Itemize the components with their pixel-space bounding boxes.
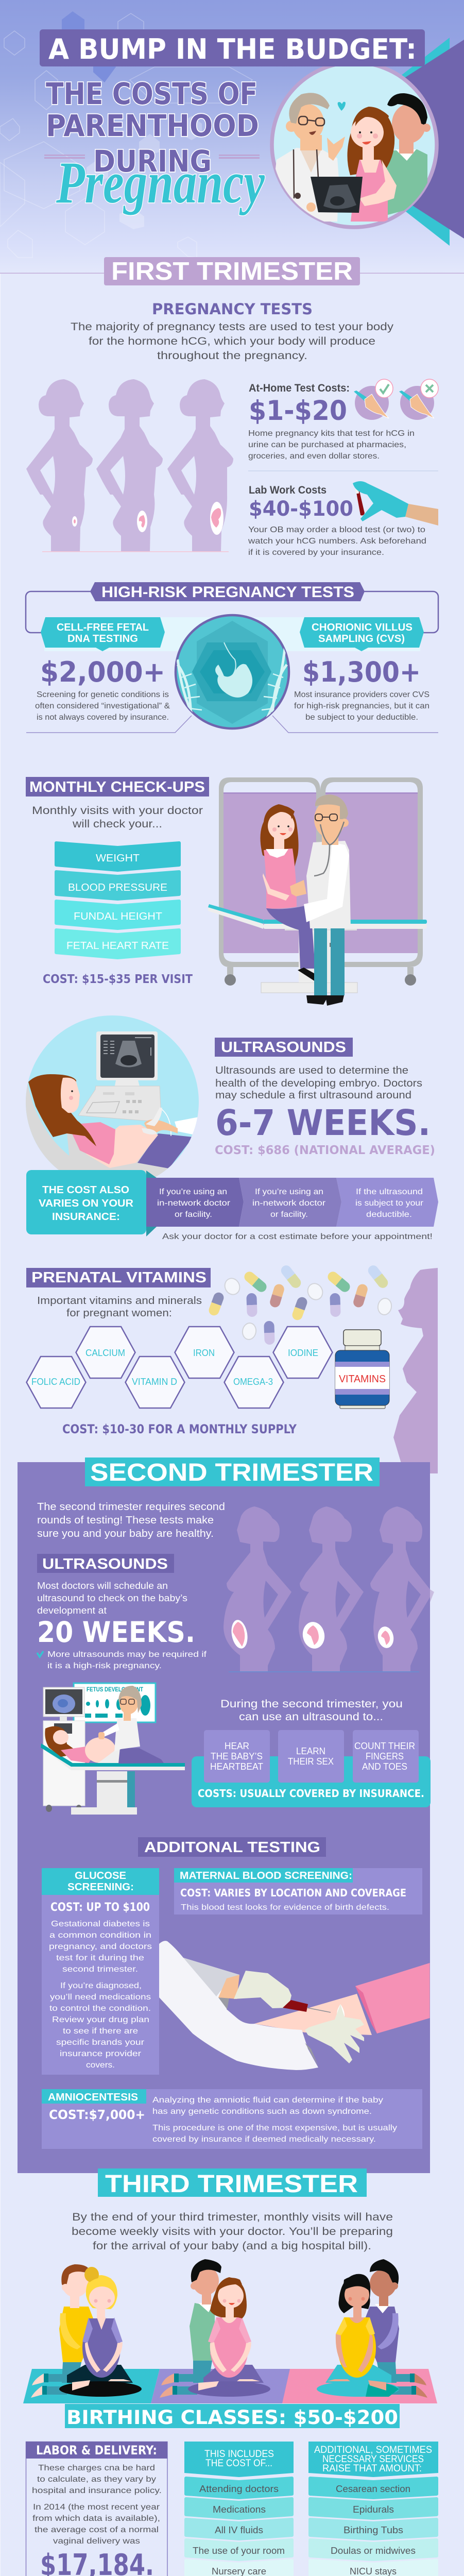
panel: second trimester bbox=[18, 1462, 430, 2173]
panel: labor and delivery: from which data is available), bbox=[32, 2514, 160, 2523]
panel: glucose screening: to control the condition. bbox=[49, 2004, 151, 2013]
prenatal vitamins intro: for pregnant women: bbox=[66, 1308, 172, 1319]
ultrasounds text: COST: $686 (NATIONAL AVERAGE) bbox=[215, 1144, 435, 1157]
hero circle with doctor and couple bbox=[272, 62, 437, 227]
panel: maternal blood screening: COST: VARIES BY LOCATION AND COVERAGE bbox=[180, 1887, 406, 1899]
table base bbox=[97, 1771, 127, 1807]
vitamin hexagons: VITAMIN D bbox=[132, 1377, 177, 1387]
lab work costs: if it is covered by your insurance. bbox=[248, 548, 384, 557]
insurance strip: in-network doctor bbox=[157, 1199, 231, 1208]
vitamin hexagons: FOLIC ACID bbox=[31, 1377, 80, 1387]
patient bbox=[28, 1074, 158, 1168]
second trimester intro: rounds of testing! These tests make bbox=[37, 1515, 214, 1526]
second trimester silhouettes bbox=[224, 1506, 434, 1672]
chevron list: checks: FETAL HEART RATE bbox=[66, 940, 169, 952]
third trimester intro: become weekly visits with your doctor. You’ll be preparing bbox=[72, 2226, 393, 2238]
panel: chorionic villus sampling: $1,300+ bbox=[302, 656, 421, 688]
lab work costs: Lab Work Costs bbox=[249, 484, 326, 496]
pregnancy tests heading: PREGNANCY TESTS bbox=[152, 300, 313, 318]
embryo and dna circle bbox=[176, 615, 289, 732]
woman bbox=[347, 107, 397, 222]
prenatal vitamins heading bbox=[26, 1268, 211, 1287]
subtitle: DURING bbox=[93, 144, 212, 179]
panel: labor and delivery: the average cost of a normal bbox=[35, 2526, 159, 2534]
panel: glucose screening: second trimester. bbox=[62, 1965, 138, 1974]
third trimester intro bbox=[72, 2211, 393, 2252]
vitamins cost: COST: $10-30 FOR A MONTHLY SUPPLY bbox=[62, 1422, 297, 1436]
chevron list: checks: WEIGHT bbox=[96, 853, 140, 864]
chevron list: checks: BLOOD PRESSURE bbox=[68, 882, 167, 893]
at-home test costs: $1-$20 bbox=[249, 395, 347, 427]
insurance strip: If you’re using an bbox=[255, 1188, 323, 1196]
panel: amniocentesis: Analyzing the amniotic fluid can determine if the baby bbox=[152, 2096, 383, 2105]
cost estimate note: Ask your doctor for a cost estimate before your appointment! bbox=[162, 1232, 433, 1241]
panel: labor and delivery: In 2014 (the most recent year bbox=[33, 2503, 160, 2512]
vitamin hexagons: CALCIUM bbox=[85, 1348, 125, 1358]
insurance strip: in-network doctor bbox=[252, 1199, 326, 1208]
panel: glucose screening: covers. bbox=[86, 2061, 115, 2070]
subtitle: PARENTHOOD bbox=[46, 108, 259, 143]
panel: maternal blood screening: This blood test looks for evidence of birth defects. bbox=[181, 1903, 389, 1912]
panel: chorionic villus sampling: SAMPLING (CVS) bbox=[318, 633, 405, 645]
panel: ultrasound uses and cost: HEARTBEAT bbox=[210, 1761, 263, 1772]
second trimester ultrasounds text: it is a high-risk pregnancy. bbox=[47, 1662, 162, 1670]
chevron list: checks: FUNDAL HEIGHT bbox=[74, 911, 162, 922]
panel: chorionic villus sampling: Most insurance providers cover CVS bbox=[294, 690, 429, 699]
prenatal vitamins intro bbox=[37, 1295, 202, 1319]
second trimester banner: SECOND TRIMESTER bbox=[90, 1459, 373, 1486]
ultrasounds text: may schedule a first ultrasound around bbox=[215, 1090, 411, 1101]
insurance strip: If the ultrasound bbox=[356, 1188, 423, 1196]
panel: chorionic villus sampling bbox=[294, 617, 429, 722]
illustration: ultrasound exam bbox=[26, 1015, 199, 1177]
vitamin hexagons: OMEGA-3 bbox=[233, 1377, 273, 1387]
illustration: doctor exam room bbox=[208, 777, 427, 1006]
panel: cell-free fetal dna testing: $2,000+ bbox=[40, 656, 165, 688]
first trimester banner bbox=[0, 257, 464, 285]
panel: ultrasound uses and cost: AND TOES bbox=[362, 1761, 407, 1772]
panel: amniocentesis bbox=[42, 2089, 422, 2149]
panel: glucose screening: specific brands your bbox=[56, 2038, 145, 2047]
panel: glucose screening: pregnancy, and doctors bbox=[49, 1942, 152, 1951]
panel: amniocentesis: has any genetic conditions such as down syndrome. bbox=[152, 2107, 372, 2116]
second trimester ultrasounds heading: ULTRASOUNDS bbox=[42, 1556, 168, 1572]
panel: glucose screening: to see if there are bbox=[63, 2027, 138, 2036]
panel: cell-free fetal dna testing: often considered “investigational” & bbox=[35, 702, 170, 710]
panel: glucose screening bbox=[42, 1868, 159, 2075]
panel: cell-free fetal dna testing: CELL-FREE FETAL bbox=[57, 622, 149, 633]
panel: chorionic villus sampling: CHORIONIC VILLUS bbox=[312, 622, 413, 633]
pills bbox=[208, 1263, 393, 1345]
list: costs included: Attending doctors bbox=[199, 2484, 279, 2494]
insurance strip: INSURANCE: bbox=[52, 1211, 120, 1223]
high-risk section frame bbox=[26, 591, 438, 733]
panel: labor and delivery bbox=[26, 2442, 167, 2576]
panel: glucose screening: GLUCOSE bbox=[75, 1870, 126, 1882]
first trimester banner: FIRST TRIMESTER bbox=[111, 258, 353, 285]
third trimester banner: THIRD TRIMESTER bbox=[105, 2171, 358, 2198]
pregnancy tests intro: for the hormone hCG, which your body will produce bbox=[89, 335, 375, 347]
list: additional services: Epidurals bbox=[353, 2504, 394, 2515]
heart bbox=[338, 102, 346, 111]
at-home test costs: urine can be purchased at pharmacies, bbox=[248, 440, 406, 449]
second trimester ultrasound uses intro: During the second trimester, you bbox=[220, 1698, 403, 1710]
illustration: fetal development exam: FETUS DEVELOPMENT bbox=[87, 1686, 144, 1693]
panel: amniocentesis: covered by insurance if deemed medically necessary. bbox=[152, 2135, 376, 2144]
insurance strip: THE COST ALSO bbox=[42, 1184, 129, 1196]
second trimester intro: The second trimester requires second bbox=[37, 1501, 225, 1513]
second trimester intro bbox=[37, 1501, 225, 1539]
list: additional services: ADDITIONAL, SOMETIMES bbox=[314, 2445, 432, 2455]
second trimester ultrasounds text: 20 WEEKS. bbox=[37, 1616, 195, 1649]
panel: maternal blood screening bbox=[174, 1868, 422, 1914]
panel: cell-free fetal dna testing: Screening for genetic conditions is bbox=[37, 690, 169, 699]
panel: amniocentesis: This procedure is one of the most expensive, but is usually bbox=[152, 2124, 397, 2132]
second trimester ultrasounds text: Most doctors will schedule an bbox=[37, 1581, 168, 1591]
ultrasounds text: Ultrasounds are used to determine the bbox=[215, 1065, 408, 1076]
couple two bbox=[160, 2259, 270, 2398]
birthing class mats bbox=[23, 2369, 437, 2403]
monthly check-ups intro: Monthly visits with your doctor bbox=[32, 805, 203, 817]
panel: ultrasound uses and cost bbox=[192, 1730, 431, 1807]
panel: chorionic villus sampling: for high-risk pregnancies, but it can bbox=[294, 702, 429, 710]
panel: chorionic villus sampling: be subject to your deductible. bbox=[305, 713, 418, 722]
panel: cell-free fetal dna testing: DNA TESTING bbox=[67, 633, 138, 645]
insurance strip: or facility. bbox=[270, 1210, 308, 1219]
second trimester ultrasound uses intro: can use an ultrasound to... bbox=[239, 1711, 383, 1723]
panel: maternal blood screening: MATERNAL BLOOD SCREENING: bbox=[180, 1870, 352, 1882]
subtitle bbox=[44, 76, 265, 215]
panel: ultrasound uses and cost: HEAR bbox=[225, 1741, 249, 1751]
panel: glucose screening: Review your drug plan bbox=[52, 2015, 149, 2024]
panel: amniocentesis: AMNIOCENTESIS bbox=[48, 2092, 138, 2103]
vitamin hexagons: IODINE bbox=[288, 1348, 318, 1358]
additional testing heading: ADDITONAL TESTING bbox=[144, 1839, 320, 1856]
lab work costs bbox=[248, 484, 426, 557]
insurance strip: is subject to your bbox=[355, 1199, 424, 1208]
insurance strip: deductible. bbox=[366, 1210, 412, 1219]
doctor bbox=[290, 794, 351, 1006]
monthly check-ups heading: MONTHLY CHECK-UPS bbox=[29, 779, 205, 795]
second trimester ultrasounds text: ultrasound to check on the baby’s bbox=[37, 1593, 187, 1603]
three pregnant silhouettes bbox=[26, 379, 233, 552]
high-risk heading: HIGH-RISK PREGNANCY TESTS bbox=[101, 584, 354, 601]
panel: glucose screening: test for it during the bbox=[56, 1954, 144, 1962]
illustration: fetal development exam bbox=[41, 1683, 185, 1815]
doctor bbox=[114, 1718, 140, 1752]
ultrasounds text: health of the developing embryo. Doctors bbox=[215, 1078, 422, 1089]
icon: gloved hand with blood vial bbox=[353, 481, 438, 526]
vitamin hexagons bbox=[27, 1327, 333, 1408]
list: additional services: Birthing Tubs bbox=[343, 2525, 403, 2535]
birthing classes banner: BIRTHING CLASSES: $50-$200 bbox=[66, 2406, 398, 2429]
monthly check-ups cost: COST: $15-$35 PER VISIT bbox=[43, 973, 193, 986]
panel: labor and delivery: These charges cna be hard bbox=[38, 2464, 155, 2472]
panel: amniocentesis: COST:$7,000+ bbox=[49, 2107, 145, 2122]
vitamin bottle: VITAMINS bbox=[339, 1374, 386, 1385]
prenatal vitamins heading: PRENATAL VITAMINS bbox=[31, 1269, 207, 1286]
panel: cell-free fetal dna testing bbox=[35, 617, 170, 722]
insurance strip: or facility. bbox=[175, 1210, 212, 1219]
third trimester intro: for the arrival of your baby (and a big hospital bill). bbox=[93, 2240, 371, 2252]
list: additional services bbox=[308, 2442, 438, 2576]
insurance strip: If you’re using an bbox=[159, 1188, 227, 1196]
list: additional services: Doulas or midwives bbox=[331, 2546, 416, 2556]
second trimester ultrasounds text: More ultrasounds may be required if bbox=[47, 1650, 207, 1659]
pregnancy tests intro: The majority of pregnancy tests are used to test your body bbox=[71, 321, 394, 333]
vitamin bottle bbox=[335, 1330, 389, 1409]
patient bbox=[45, 1726, 80, 1757]
panel: glucose screening: COST: UP TO $100 bbox=[50, 1901, 150, 1914]
list: costs included: The use of your room bbox=[193, 2546, 285, 2556]
title banner: A BUMP IN THE BUDGET: bbox=[48, 33, 417, 65]
list: additional services: RAISE THAT AMOUNT: bbox=[322, 2463, 422, 2474]
at-home test costs bbox=[248, 382, 415, 461]
pregnancy tests intro: throughout the pregnancy. bbox=[157, 350, 307, 362]
panel: glucose screening: a common condition in bbox=[49, 1931, 151, 1940]
at-home test costs: groceries, and even dollar stores. bbox=[248, 452, 380, 461]
insurance strip: VARIES ON YOUR bbox=[39, 1198, 134, 1209]
insurance strip bbox=[26, 1170, 438, 1236]
prenatal vitamins intro: Important vitamins and minerals bbox=[37, 1295, 202, 1307]
vitamin hexagons: IRON bbox=[193, 1348, 215, 1358]
pregnancy tests intro bbox=[71, 321, 394, 362]
subtitle: THE COSTS OF bbox=[46, 76, 257, 111]
lab work costs: Your OB may order a blood test (or two) to bbox=[248, 526, 425, 534]
illustration: blood draw bbox=[159, 1941, 429, 2070]
large silhouette bbox=[393, 1268, 438, 1473]
lab work costs: $40-$100 bbox=[249, 497, 353, 521]
panel: ultrasound uses and cost: COUNT THEIR bbox=[354, 1741, 415, 1751]
third trimester intro: By the end of your third trimester, monthly visits will have bbox=[72, 2211, 393, 2223]
decorative triangles behind hero bbox=[309, 38, 464, 246]
woman on table bbox=[260, 804, 317, 981]
panel: ultrasound uses and cost: COSTS: USUALLY COVERED BY INSURANCE. bbox=[198, 1787, 424, 1800]
panel: labor and delivery: vaginal delivery was bbox=[53, 2537, 140, 2546]
doctor bbox=[273, 93, 363, 222]
panel: glucose screening: If you’re diagnosed, bbox=[60, 1981, 142, 1990]
ultrasounds text: 6-7 WEEKS. bbox=[215, 1103, 431, 1144]
panel: labor and delivery: to calculate, as they vary by bbox=[37, 2475, 156, 2484]
couple three bbox=[317, 2259, 427, 2398]
list: costs included: THE COST OF... bbox=[205, 2458, 272, 2469]
man bbox=[386, 93, 431, 215]
list: additional services: NECESSARY SERVICES bbox=[322, 2454, 424, 2465]
lab work costs: watch your hCG numbers. Ask beforehand bbox=[248, 537, 426, 546]
second trimester intro: sure you and your baby are healthy. bbox=[37, 1528, 214, 1539]
at-home test costs: Home pregnancy kits that test for hCG in bbox=[248, 429, 415, 438]
second trimester ultrasound uses intro bbox=[220, 1698, 403, 1723]
couple one bbox=[31, 2264, 142, 2398]
panel: glucose screening: SCREENING: bbox=[67, 1882, 134, 1893]
panel: labor and delivery: hospital and insurance policy. bbox=[32, 2486, 162, 2495]
ultrasounds text bbox=[215, 1065, 435, 1157]
panel: glucose screening: insurance provider bbox=[60, 2049, 142, 2058]
icon: positive test bbox=[354, 379, 393, 420]
subtitle: Pregnancy bbox=[56, 150, 265, 215]
panel: labor and delivery: LABOR & DELIVERY: bbox=[36, 2443, 157, 2458]
panel: ultrasound uses and cost: FINGERS bbox=[366, 1751, 404, 1761]
second trimester ultrasounds text bbox=[37, 1581, 207, 1670]
icon: negative test bbox=[399, 379, 438, 420]
list: costs included: Medications bbox=[213, 2504, 266, 2515]
monthly check-ups intro: will check your... bbox=[72, 818, 162, 830]
header background bbox=[0, 0, 464, 273]
panel: ultrasound uses and cost: LEARN bbox=[296, 1746, 325, 1756]
panel: ultrasound uses and cost: THE BABY’S bbox=[211, 1751, 263, 1761]
list: costs included: All IV fluids bbox=[215, 2525, 263, 2535]
panel: ultrasound uses and cost: THEIR SEX bbox=[288, 1756, 334, 1767]
second trimester ultrasounds text: development at bbox=[37, 1605, 107, 1616]
monthly check-ups intro bbox=[32, 805, 203, 830]
list: costs included bbox=[184, 2442, 294, 2576]
panel: glucose screening: you’ll need medications bbox=[50, 1993, 151, 2002]
list: costs included: THIS INCLUDES bbox=[204, 2449, 274, 2460]
chevron list: checks bbox=[56, 843, 179, 958]
ultrasounds heading: ULTRASOUNDS bbox=[221, 1039, 346, 1056]
list: additional services: Cesarean section bbox=[336, 2484, 410, 2494]
panel: glucose screening: Gestational diabetes is bbox=[51, 1920, 150, 1928]
panel: cell-free fetal dna testing: is not always covered by insurance. bbox=[37, 713, 169, 722]
at-home test costs: At-Home Test Costs: bbox=[249, 382, 350, 394]
